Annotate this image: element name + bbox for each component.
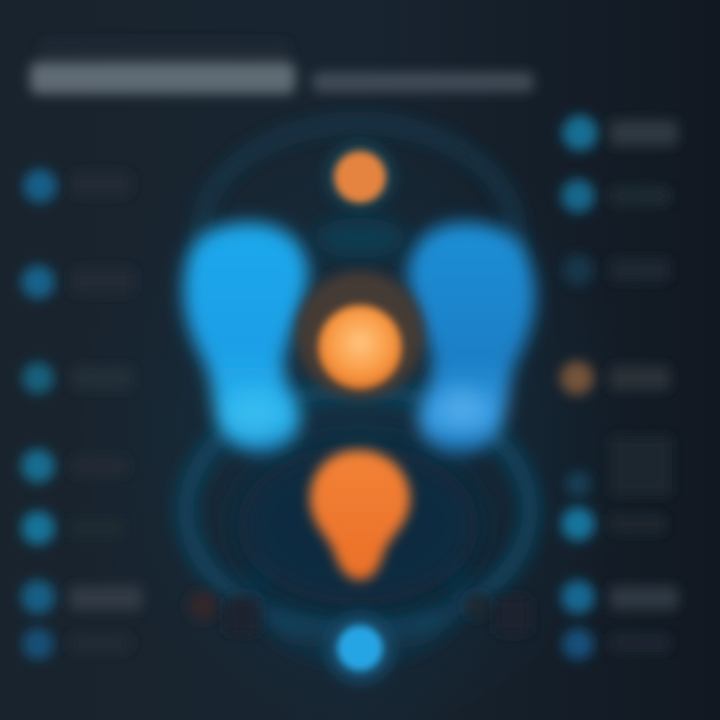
lower orange bulb	[310, 450, 410, 580]
left item 2	[21, 265, 134, 299]
right item 4	[560, 361, 670, 395]
right item 6	[561, 507, 665, 541]
left item 4	[21, 449, 127, 483]
right item 2	[561, 179, 670, 213]
right item 7	[561, 580, 678, 614]
left item 5	[21, 511, 122, 545]
right column items	[560, 115, 678, 660]
left item 7	[22, 628, 130, 660]
left column items	[21, 169, 142, 660]
right item 5	[565, 436, 672, 497]
left item 3	[22, 362, 132, 394]
left item 1	[23, 169, 130, 203]
bottom blue node	[324, 612, 396, 684]
top orange node	[324, 140, 396, 212]
center dark band	[314, 218, 406, 258]
right blue lobe	[408, 222, 535, 453]
left item 6	[21, 580, 142, 614]
central diagram	[183, 123, 535, 684]
right item 8	[562, 628, 670, 660]
right item 1	[562, 115, 678, 151]
title	[30, 42, 534, 94]
lower left faint item	[188, 591, 260, 634]
right item 3	[562, 254, 670, 286]
inner dark-blue fill	[238, 445, 478, 605]
light highlight left	[228, 390, 280, 438]
lower right faint item	[465, 593, 530, 634]
diagram rings	[186, 123, 530, 656]
left blue lobe	[183, 222, 308, 453]
central orange node	[296, 271, 424, 399]
light highlight right	[440, 388, 484, 428]
